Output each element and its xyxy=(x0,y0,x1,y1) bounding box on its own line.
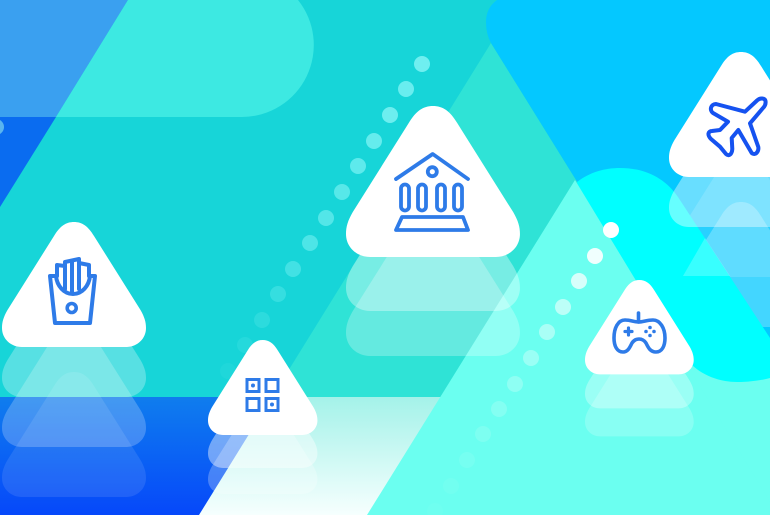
pale teal rounded shape xyxy=(56,0,314,117)
grid white triangle xyxy=(208,340,317,435)
bank reflections xyxy=(346,160,520,356)
food white triangle xyxy=(2,222,146,347)
translucent triangle over cyan xyxy=(683,238,730,276)
green mountain xyxy=(272,43,640,397)
deep blue wedge xyxy=(0,117,56,207)
icon: grid xyxy=(247,380,278,410)
dot at left edge xyxy=(0,119,4,135)
deep blue floor xyxy=(0,397,300,515)
grid triangle xyxy=(208,340,317,494)
plane reflection xyxy=(669,102,770,227)
game triangle xyxy=(585,280,694,436)
food reflections xyxy=(2,272,146,497)
icon: airplane xyxy=(708,98,766,155)
pale floor mountain xyxy=(199,397,445,515)
game reflections xyxy=(585,314,694,436)
top-left blue block xyxy=(0,0,128,117)
icon: game controller xyxy=(614,313,665,352)
plane white triangle xyxy=(669,52,770,177)
icon: bank xyxy=(396,154,468,230)
sky blue rounded shape xyxy=(486,0,770,400)
game white triangle xyxy=(585,280,694,374)
dotted trail: left xyxy=(220,56,430,379)
food triangle xyxy=(2,222,146,497)
bank triangle xyxy=(346,106,520,356)
cyan rounded shape xyxy=(577,168,770,382)
grid reflections xyxy=(208,373,317,494)
dotted trail: right xyxy=(427,222,619,515)
plane triangle xyxy=(669,52,770,227)
icon: french fries xyxy=(50,259,95,323)
plane reflections behind cyan xyxy=(669,152,770,327)
aqua mountain xyxy=(367,180,770,515)
aqua ground right xyxy=(600,350,770,515)
bank white triangle xyxy=(346,106,520,257)
